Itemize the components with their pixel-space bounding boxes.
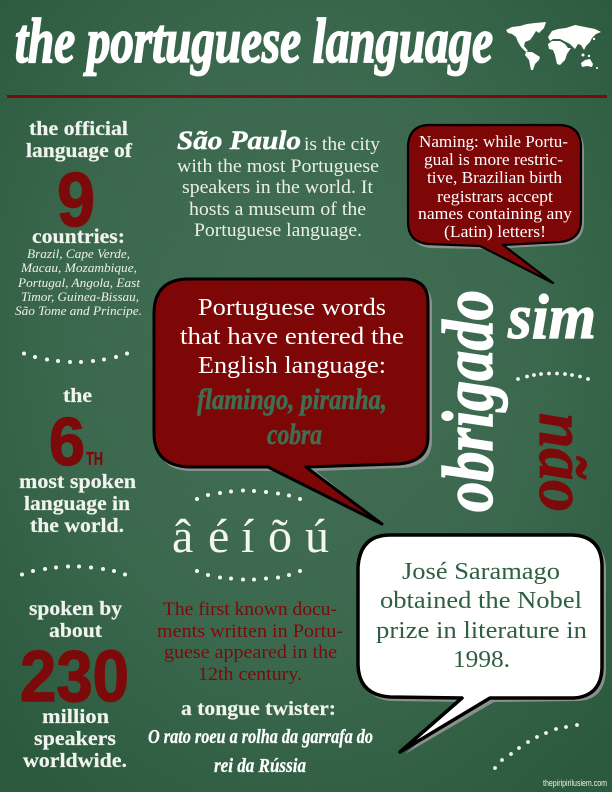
list of countries: Portugal, Angola, East (17, 275, 140, 290)
panel: 230 million speakers (20, 599, 129, 772)
word: não: não (525, 413, 601, 512)
bubble text: gual is more restric- (424, 150, 563, 169)
text: São Paulo: São Paulo (177, 126, 301, 155)
label: the: the (63, 386, 92, 407)
text: São Paulo: is the city (304, 135, 381, 155)
text: spoken by about: spoken by (29, 599, 122, 620)
text: São Paulo: with the most Portuguese (177, 157, 379, 177)
bubble text: names containing any (418, 204, 573, 223)
text: most spoken language: language in (24, 494, 130, 515)
bubble text: English language: (198, 352, 386, 379)
list of countries: Brazil, Cape Verde, (27, 246, 130, 261)
text: spoken by about (29, 599, 122, 642)
bubble text: 1998. (453, 647, 510, 673)
dotted arc 1 (22, 352, 129, 364)
panel: 6th most spoken (19, 386, 136, 537)
bubble text: that have entered the (180, 323, 404, 350)
list of countries: São Tome and Principe. (15, 303, 142, 318)
bubble text (376, 559, 587, 673)
text: São Paulo: speakers in the world. It (182, 178, 374, 198)
text: most spoken language (19, 472, 136, 537)
bubble text: Portuguese words (198, 294, 386, 321)
panel: official language (15, 119, 142, 318)
text: first known documents (157, 600, 343, 685)
bubble shape (358, 535, 606, 754)
text: tongue twister phrase (148, 726, 373, 777)
dotted arc 4 (195, 488, 302, 501)
label: countries: countries: (32, 224, 125, 248)
text: tongue twister phrase: rei da Rússia (214, 755, 306, 777)
icon: world map (506, 22, 601, 70)
loan words: flamingo, piranha, (197, 383, 387, 416)
red divider rule (7, 95, 607, 98)
bubble text: José Saramago (402, 559, 560, 585)
loan words (197, 383, 387, 451)
word: sim: sim (507, 281, 596, 352)
bubble text: Naming: while Portu- (419, 132, 568, 151)
list of countries: Macau, Mozambique, (20, 260, 137, 275)
text: million speakers worldwide: worldwide. (23, 751, 127, 772)
dotted diagonal arc (493, 723, 579, 770)
speech bubble: naming (408, 125, 584, 283)
bubble shape (154, 279, 432, 524)
heading: official language of: language of (26, 141, 133, 162)
speech bubble: José Saramago (358, 535, 606, 754)
dotted arc 5 (195, 569, 302, 582)
bubble text: tive, Brazilian birth (427, 168, 563, 187)
number: 6th: 6 (49, 404, 85, 480)
bubble text: prize in literature in (376, 618, 587, 644)
speech bubble: Portuguese words (154, 279, 432, 524)
text: first known documents: The first known docu- (163, 600, 337, 620)
loan words: cobra (267, 418, 322, 451)
bubble text: (Latin) letters! (444, 222, 546, 241)
number: 230: 230 (20, 637, 129, 717)
text: first known documents: 12th century. (198, 665, 302, 685)
text: million speakers worldwide: million (42, 707, 109, 728)
bubble shape (408, 125, 584, 283)
list of countries (15, 246, 142, 318)
heading: official language of: the official (29, 119, 129, 140)
bubble text (418, 132, 573, 241)
text: tongue twister phrase: O rato roeu a rolha da garrafa do (148, 726, 373, 748)
text: spoken by about: about (49, 621, 103, 642)
text: most spoken language: the world. (30, 516, 124, 537)
word: obrigado: obrigado (428, 290, 508, 512)
heading: tongue twister: a tongue twister: (181, 699, 336, 720)
text: São Paulo (177, 126, 381, 241)
bubble text: registrars accept (437, 187, 553, 206)
dotted arc 3 (516, 372, 590, 381)
bubble text (180, 294, 404, 379)
dotted arc 2 (20, 564, 127, 576)
text: São Paulo: hosts a museum of the (189, 200, 366, 220)
text: million speakers worldwide: speakers (34, 729, 116, 750)
accented vowels: â é í õ ú (172, 510, 329, 563)
text: most spoken language: most spoken (19, 472, 136, 493)
text: São Paulo: Portuguese language. (194, 221, 362, 241)
text: first known documents: guese appeared in the (164, 643, 337, 663)
number: 9: 9 (57, 158, 95, 243)
heading: official language of (26, 119, 133, 162)
text: first known documents: ments written in Portu- (157, 622, 343, 642)
list of countries: Timor, Guinea-Bissau, (21, 289, 139, 304)
bubble text: obtained the Nobel (380, 588, 582, 614)
number: 6th: TH (86, 449, 103, 469)
text: million speakers worldwide (23, 707, 127, 772)
